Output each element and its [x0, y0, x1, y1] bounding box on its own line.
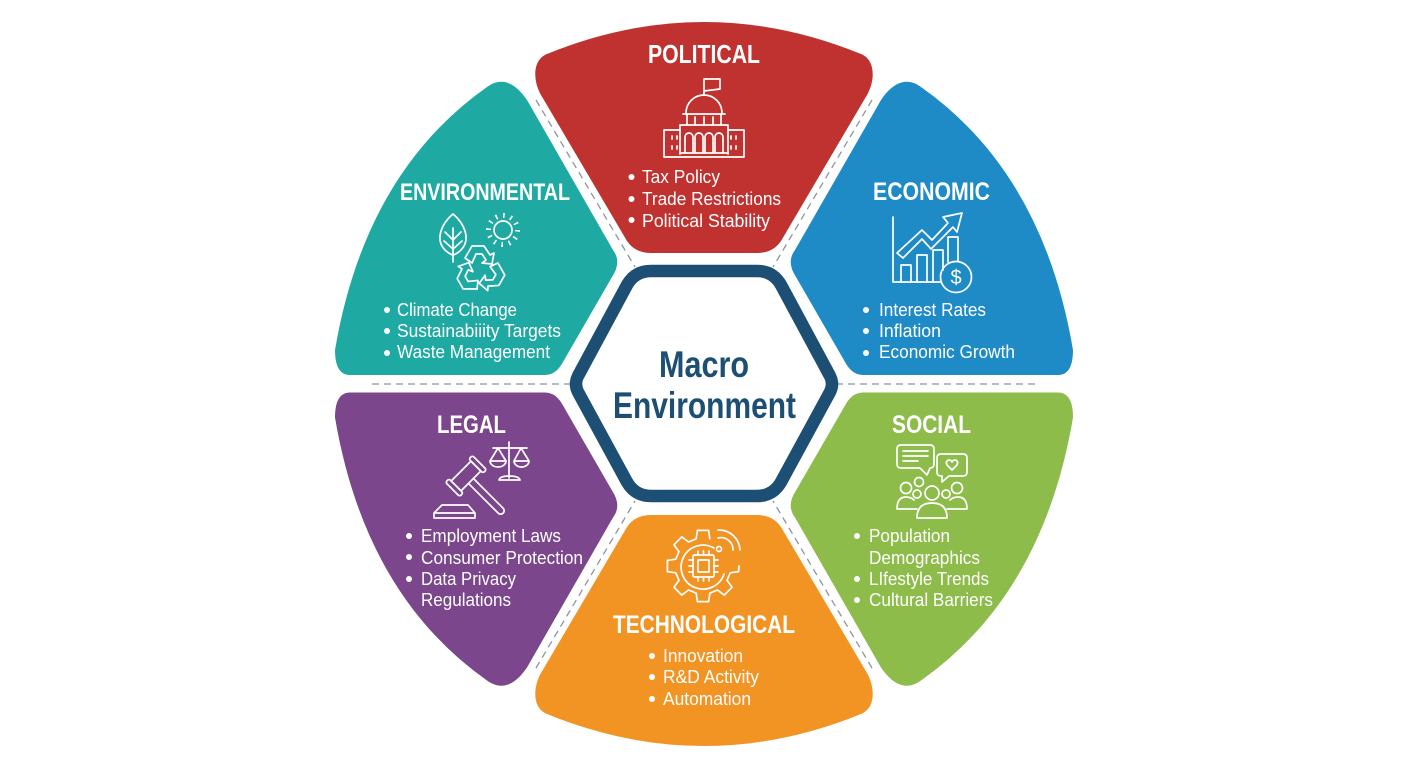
- technological bullet list: Innovation: [663, 646, 743, 666]
- political heading: POLITICAL: [648, 39, 760, 69]
- environmental bullet list: Sustainabiiity Targets: [397, 321, 561, 341]
- hexagon outline: [576, 271, 832, 496]
- icon: speech bubbles and people: [897, 445, 967, 518]
- social segment shape: [791, 392, 1073, 686]
- social bullet list: Cultural Barriers: [869, 590, 993, 610]
- legal heading: LEGAL: [437, 411, 506, 439]
- icon: leaf, sun and recycling: [440, 214, 518, 295]
- political bullet list: [628, 167, 781, 231]
- economic bullet list: Inflation: [879, 321, 941, 341]
- political bullet list: Tax Policy: [642, 167, 720, 187]
- environmental bullet list: [384, 300, 561, 362]
- panel: political: [535, 22, 873, 253]
- political segment shape: [535, 22, 873, 253]
- technological bullet list: [649, 646, 759, 709]
- panel: social: [791, 392, 1073, 686]
- legal bullet list: Data Privacy: [421, 569, 516, 589]
- political bullet list: Trade Restrictions: [642, 189, 781, 209]
- legal bullet list: Regulations: [421, 590, 511, 610]
- environmental bullet list: Waste Management: [397, 342, 550, 362]
- technological bullet list: Automation: [663, 689, 751, 709]
- icon: gavel and scales: [434, 442, 529, 527]
- social bullet list: Demographics: [869, 548, 980, 568]
- environmental segment shape: [335, 82, 617, 375]
- panel: environmental: [335, 82, 617, 375]
- center hexagon: macro environment: [576, 271, 832, 496]
- social bullet list: LIfestyle Trends: [869, 569, 989, 589]
- social heading: SOCIAL: [892, 411, 971, 439]
- economic bullet list: Interest Rates: [879, 300, 986, 320]
- environmental heading: ENVIRONMENTAL: [400, 179, 570, 206]
- panel: technological: [535, 515, 873, 746]
- technological heading: TECHNOLOGICAL: [613, 611, 795, 639]
- panel: economic: [791, 82, 1073, 375]
- economic bullet list: Economic Growth: [879, 342, 1015, 362]
- legal bullet list: Consumer Protection: [421, 548, 583, 568]
- technological segment shape: [535, 515, 873, 746]
- economic heading: ECONOMIC: [873, 178, 990, 206]
- icon: dollar sign: $: [950, 267, 962, 289]
- center title: Macro: [659, 344, 749, 385]
- icon: capitol building: [664, 79, 744, 157]
- social bullet list: Population: [869, 526, 950, 546]
- technological bullet list: R&D Activity: [663, 667, 759, 687]
- economic bullet list: [863, 300, 1015, 362]
- panel: legal: [335, 392, 617, 686]
- economic segment shape: [791, 82, 1073, 375]
- legal bullet list: [406, 526, 583, 610]
- environmental bullet list: Climate Change: [397, 300, 517, 320]
- icon: gear with chip and signal: [667, 530, 740, 602]
- center title second line: Environment: [613, 385, 796, 426]
- legal segment shape: [335, 392, 617, 686]
- icon: growth chart with coin: [893, 213, 972, 292]
- political bullet list: Political Stability: [642, 211, 770, 231]
- legal bullet list: Employment Laws: [421, 526, 561, 546]
- social bullet list: [854, 526, 993, 610]
